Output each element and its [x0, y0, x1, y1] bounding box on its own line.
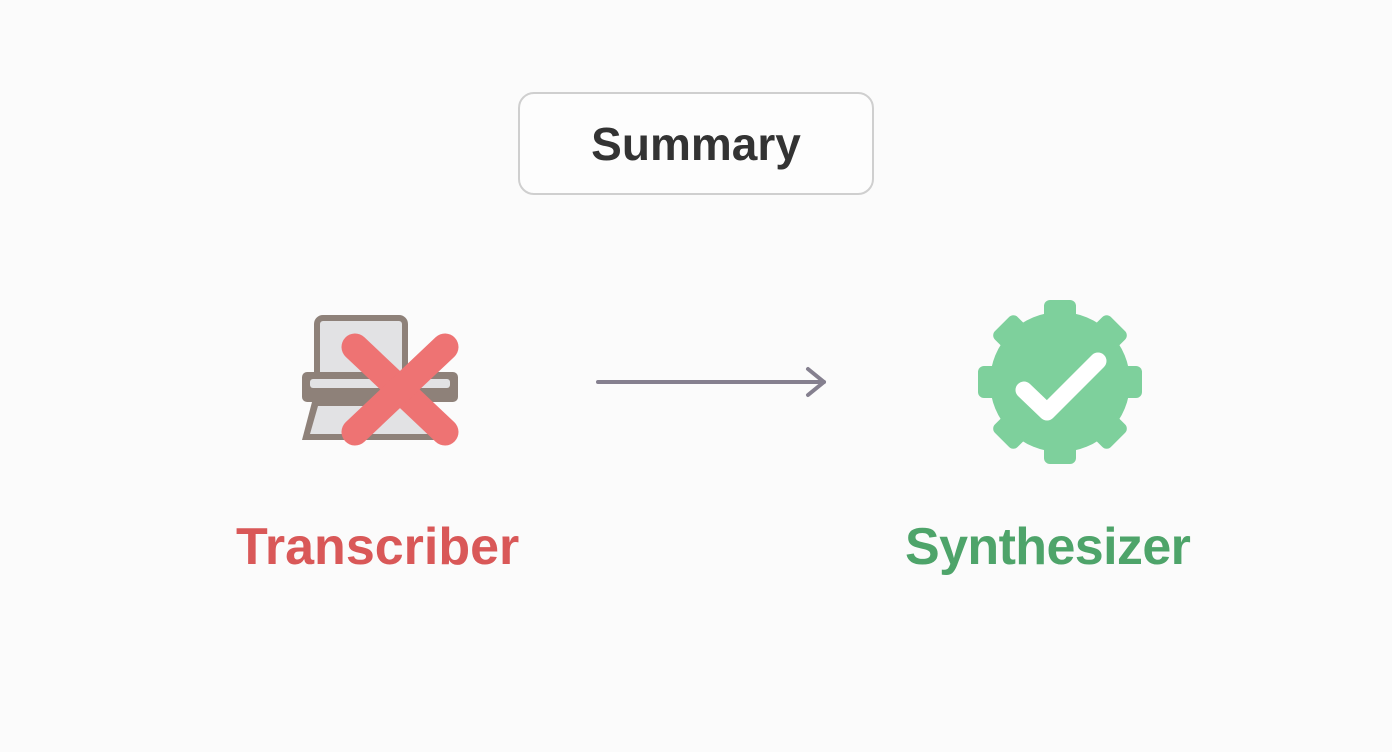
label: Transcriber: Transcriber	[236, 518, 519, 576]
icon: printer with red X	[302, 315, 458, 446]
arrow	[596, 366, 826, 398]
title box: Summary	[518, 92, 874, 195]
title box: Summary: Summary	[591, 118, 801, 170]
icon: green gear with check	[978, 300, 1142, 464]
label: Synthesizer: Synthesizer	[905, 518, 1190, 576]
